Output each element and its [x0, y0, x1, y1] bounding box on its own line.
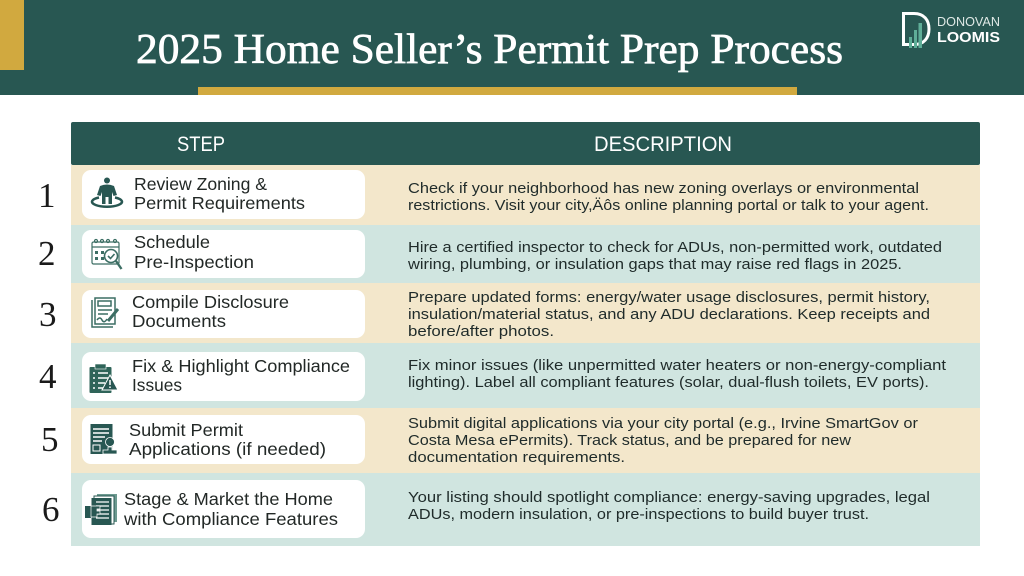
row 1: restrictions. Visit your city,Äôs online planning portal or talk to your agent. — [408, 197, 929, 214]
row 1: 1 — [38, 176, 56, 215]
table header: STEP — [177, 133, 225, 156]
table header: DESCRIPTION — [594, 133, 732, 156]
row 5: documentation requirements. — [408, 449, 625, 466]
row 5 — [41, 408, 980, 473]
row 6: ADUs, modern insulation, or pre-inspections to build buyer trust. — [408, 506, 869, 523]
icon: clipboard with warning — [90, 364, 118, 393]
row 6: Stage & Market the Home — [124, 489, 333, 509]
row 3: insulation/material status, and any ADU declarations. Keep receipts and — [408, 306, 930, 323]
row 5: Submit Permit — [129, 420, 243, 440]
row 4: lighting). Label all compliant features (solar, dual-flush toilets, EV ports). — [408, 374, 929, 391]
row 6 — [42, 473, 980, 546]
logo: Donovan Loomis: DONOVAN — [937, 15, 1000, 29]
icon: person on zone ring — [92, 178, 122, 207]
icon: document stack with hand — [85, 494, 117, 525]
row 2: 2 — [38, 234, 56, 273]
row 6: with Compliance Features — [123, 509, 338, 529]
row 4: 4 — [39, 357, 56, 396]
row 2 — [38, 225, 980, 283]
row 2: Hire a certified inspector to check for ADUs, non-permitted work, outdated — [408, 239, 942, 256]
row 4 — [39, 343, 980, 408]
logo: Donovan Loomis — [904, 14, 1000, 48]
row 2: Schedule — [134, 232, 210, 252]
row 4: Fix minor issues (like unpermitted water heaters or non-energy-compliant — [408, 357, 947, 374]
row 1 — [38, 165, 980, 225]
row 3 — [39, 283, 980, 343]
icon: calendar with magnifier — [92, 240, 122, 269]
table header — [71, 122, 980, 165]
row 5: 5 — [41, 420, 58, 459]
row 5: Submit digital applications via your city portal (e.g., Irvine SmartGov or — [408, 415, 918, 432]
row 3: before/after photos. — [408, 323, 554, 340]
row 4: Fix & Highlight Compliance — [132, 356, 350, 376]
icon: application with stamp — [90, 424, 117, 454]
row 3: Documents — [132, 311, 226, 331]
row 5: Applications (if needed) — [129, 439, 326, 459]
row 2: wiring, plumbing, or insulation gaps that may raise red flags in 2025. — [407, 256, 902, 273]
row 2: Pre-Inspection — [134, 252, 254, 272]
row 5: Costa Mesa ePermits). Track status, and be prepared for new — [408, 432, 851, 449]
row 3: Prepare updated forms: energy/water usage disclosures, permit history, — [408, 289, 930, 306]
row 1: Check if your neighborhood has new zoning overlays or environmental — [408, 180, 919, 197]
row 6: Your listing should spotlight compliance: energy-saving upgrades, legal — [408, 489, 930, 506]
row 1: Permit Requirements — [134, 193, 305, 213]
row 6: 6 — [42, 490, 60, 529]
header band — [0, 0, 1024, 95]
row 1: Review Zoning & — [134, 174, 267, 194]
logo: Donovan Loomis: LOOMIS — [937, 30, 1000, 46]
row 3: Compile Disclosure — [132, 292, 289, 312]
icon: document with pen — [92, 298, 118, 327]
title: 2025 Home Seller’s Permit Prep Process — [136, 27, 843, 73]
row 4: Issues — [132, 375, 182, 395]
row 3: 3 — [39, 295, 56, 334]
